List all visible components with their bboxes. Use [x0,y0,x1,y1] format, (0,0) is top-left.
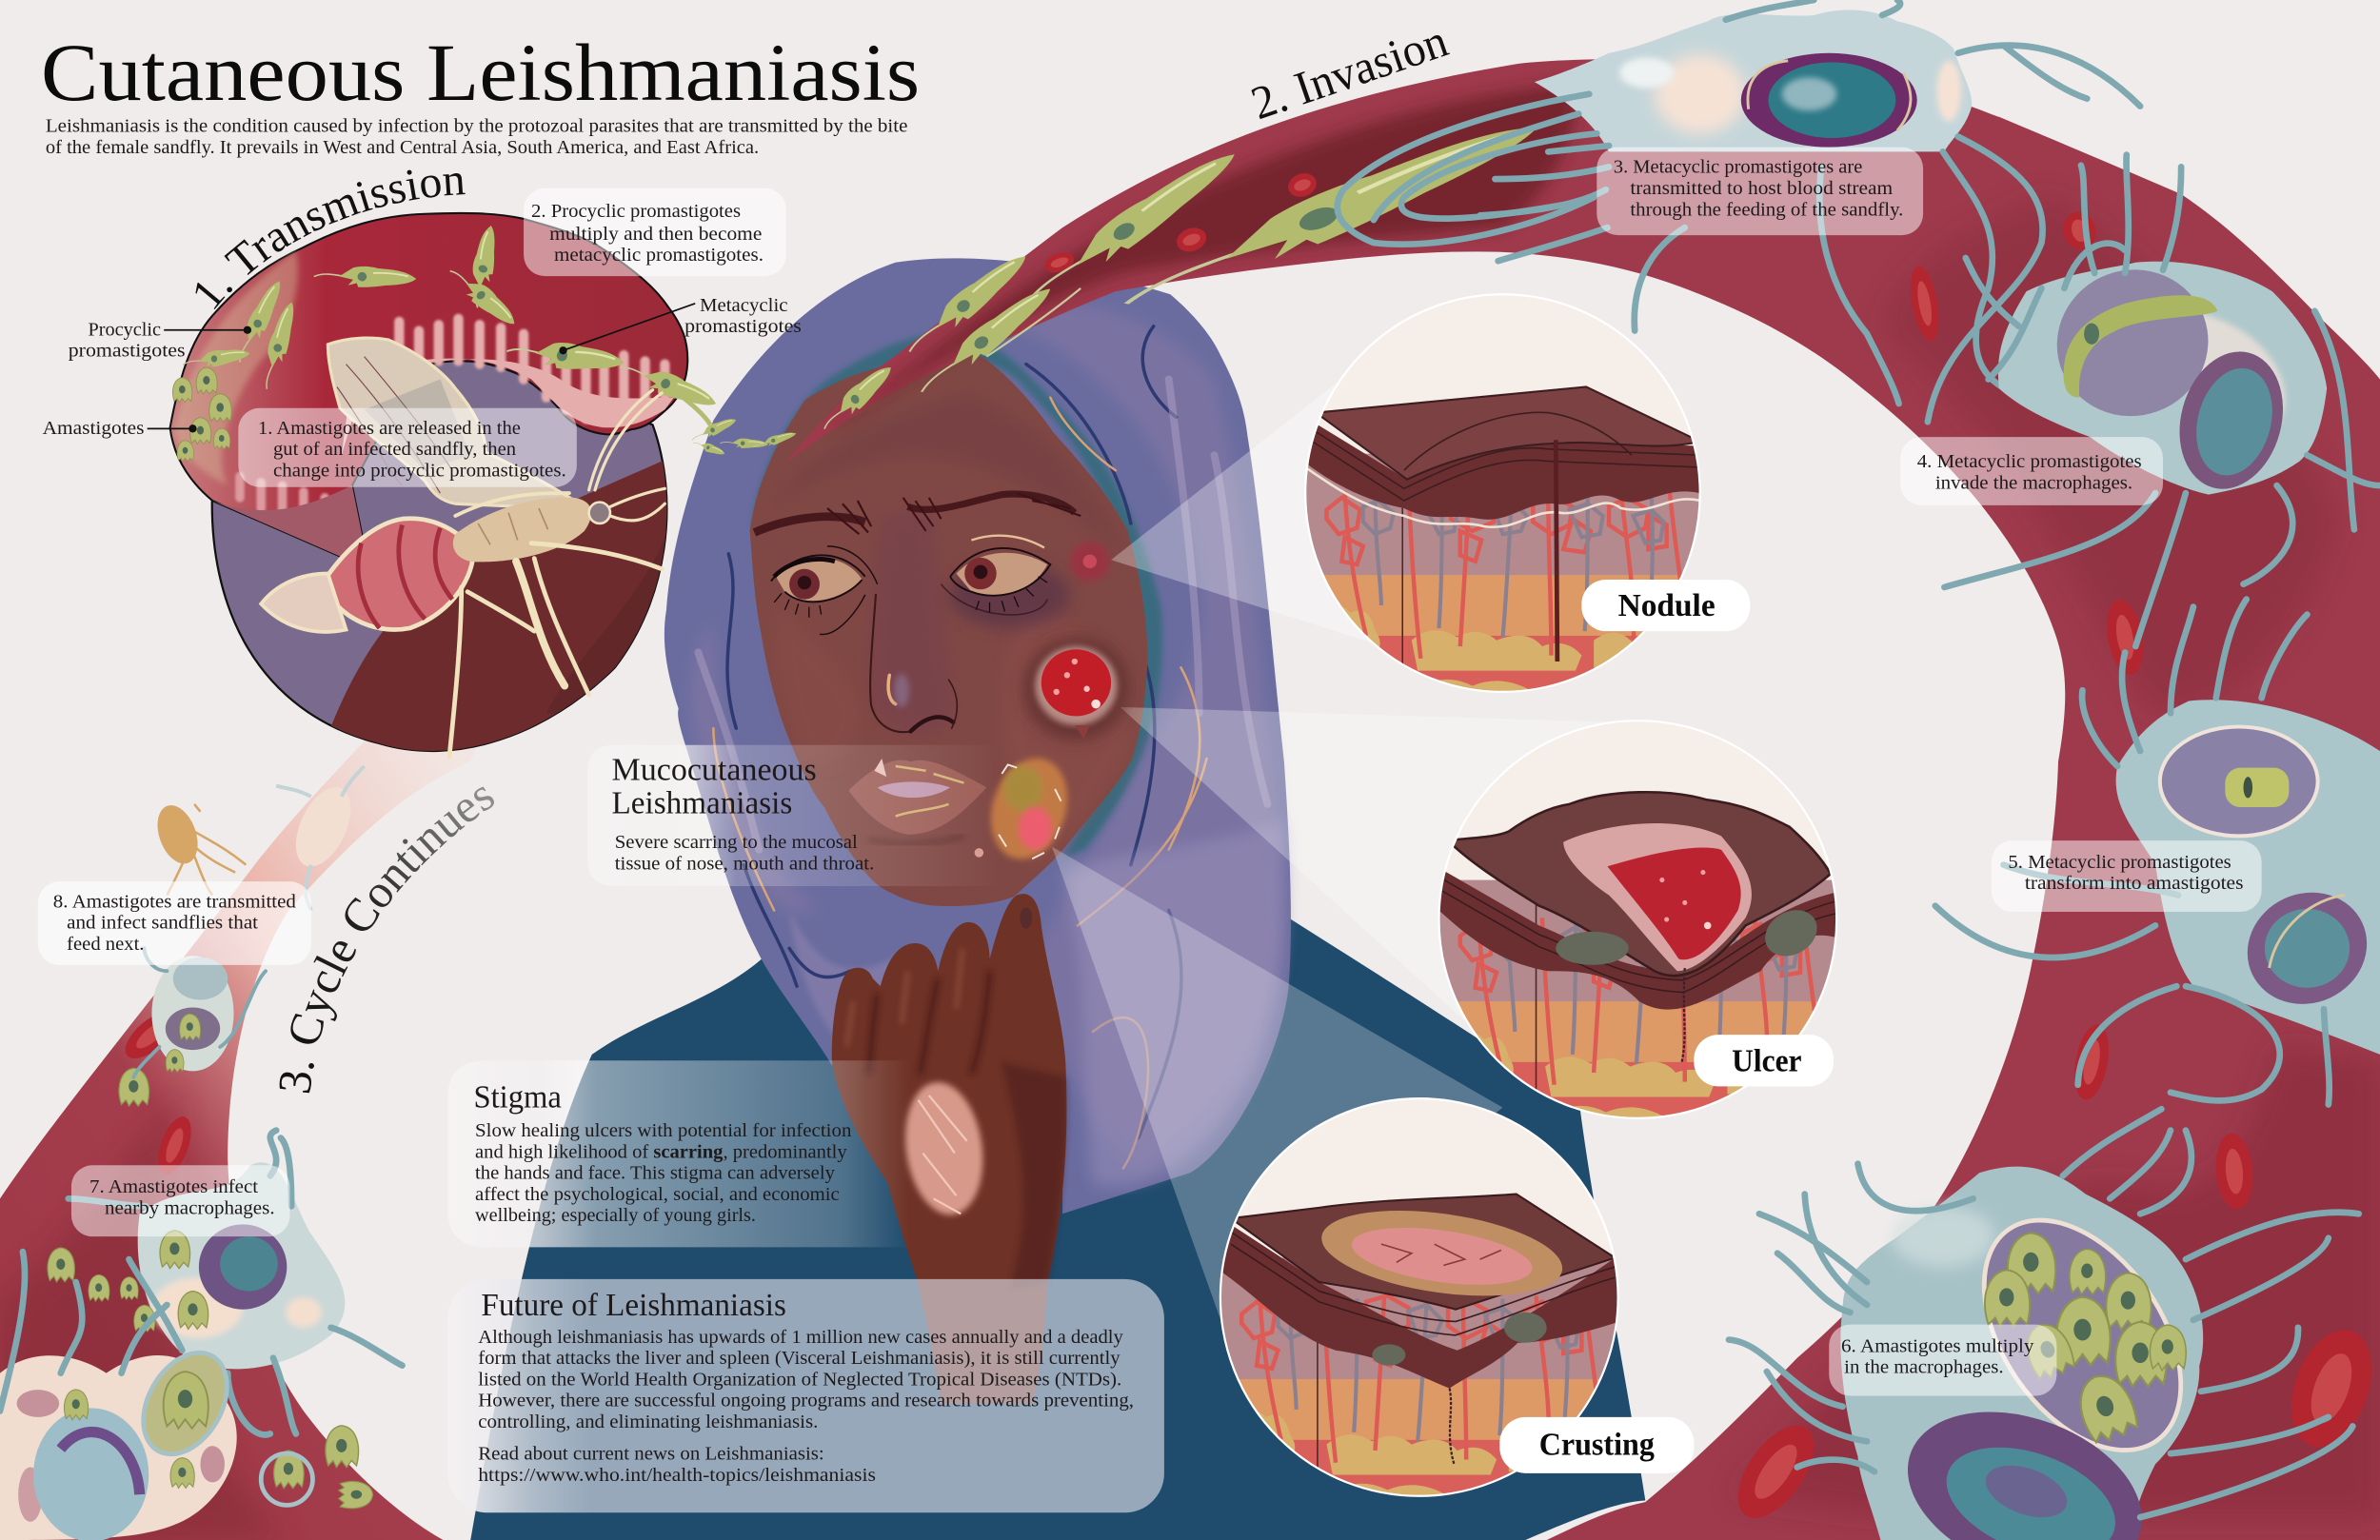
label: Ulcer [1694,1035,1834,1086]
panel: stigma: Stigma [473,1080,562,1116]
left eye [771,546,878,635]
step 5 callout: 5. Metacyclic promastigotes [2008,852,2231,873]
eye socket [948,562,1070,628]
panel: stigma: affect the psychological, social, and economic [475,1184,840,1205]
label: procyclic promastigotes [69,319,251,362]
step 4 callout: invade the macrophages. [1935,472,2132,493]
eyebrows [754,493,1081,534]
skin diagram: crusting [1215,1098,1694,1501]
step 3 callout: through the feeding of the sandfly. [1630,199,1903,220]
hood [664,258,1291,1214]
step 2 callout [524,188,786,276]
panel: stigma: wellbeing; especially of young girls. [475,1205,756,1226]
nucleus [199,1224,287,1310]
panel: future of leishmaniasis [447,1279,1164,1512]
step 5 callout: transform into amastigotes [2025,873,2244,894]
step 3 callout: transmitted to host blood stream [1630,178,1894,199]
step 8 callout: feed next. [67,934,144,955]
step 5 callout [1992,840,2262,912]
step 8 callout [38,881,311,965]
tendrils [1944,155,2380,646]
label: Nodule [1581,580,1750,631]
thorax [453,498,591,562]
tendrils [1935,600,2330,1104]
lips [848,759,986,843]
vacuole with amastigotes [1944,1184,2221,1486]
label: metacyclic promastigotes: Metacyclic [700,295,788,316]
nucleus [2229,873,2380,1023]
panel: future of leishmaniasis: However, there are successful ongoing programs and research towards preventing, [478,1391,1134,1412]
legs [449,390,664,757]
nose [870,595,957,732]
head [589,503,610,523]
panel: future of leishmaniasis: Although leishmaniasis has upwards of 1 million new cases annually and a deadly [478,1327,1123,1348]
step 1 callout [238,408,577,487]
nucleus [1741,53,1917,148]
step 1 callout: change into procyclic promastigotes. [273,461,566,482]
macrophage: lower-left with vacuoles [0,1248,373,1540]
label: Ulcer: Ulcer [1732,1043,1802,1078]
step 6 callout: in the macrophages. [1844,1357,2004,1378]
step 1 callout: 1. Amastigotes are released in the [258,418,521,439]
promastigotes in the vessel [813,117,1550,431]
parasites crossing onto the hood [683,398,798,461]
parasites in gut [172,224,719,462]
panel: stigma: Slow healing ulcers with potential for infection [475,1120,851,1141]
heading: 2. Invasion: 2. Invasion [1244,14,1454,129]
intro text [46,116,908,158]
step 2 callout: 2. Procyclic promastigotes [531,201,741,222]
macrophage: metacyclic invades [1944,155,2380,646]
nodule lesion [1070,542,1109,582]
blood vessel arc: cycle continues [0,622,492,1540]
step 2 callout: metacyclic promastigotes. [554,245,764,266]
panel: mucocutaneous leishmaniasis: Mucocutaneous [612,752,817,787]
face [750,354,1147,906]
panel: mucocutaneous leishmaniasis: tissue of nose, mouth and throat. [615,853,874,874]
label: procyclic promastigotes: promastigotes [69,341,186,362]
step 2 callout: multiply and then become [549,224,762,245]
label: Nodule: Nodule [1618,588,1716,623]
macrophage: top of arc [1338,0,2140,422]
nucleus [1885,1382,2165,1540]
blood vessel arc: invasion and host [784,59,2380,1540]
panel: stigma: the hands and face. This stigma can adversely [475,1163,835,1184]
tendrils [1338,0,2140,422]
tendrils [1729,1109,2359,1517]
panel: future of leishmaniasis: Read about current news on Leishmaniasis: [478,1444,824,1465]
panel: mucocutaneous leishmaniasis: Severe scarring to the mucosal [615,832,858,853]
lesions on face [975,542,1129,869]
label: metacyclic promastigotes: promastigotes [684,316,802,337]
macrophage: amastigotes multiply [1729,1109,2359,1540]
step 7 callout: 7. Amastigotes infect [89,1176,258,1197]
figure: woman in a hood [470,258,1645,1540]
panel: future of leishmaniasis: form that attacks the liver and spleen (Visceral Leishmaniasis), it is still currently [478,1348,1121,1369]
nucleus [2165,340,2298,501]
intro text: of the female sandfly. It prevails in West and Central Asia, South America, and East Africa. [46,137,759,158]
macrophage: transforming into amastigotes [1935,600,2380,1104]
panel: future of leishmaniasis: controlling, and eliminating leishmaniasis. [478,1412,818,1432]
title: Cutaneous Leishmaniasis [41,27,920,118]
crusting lesion [975,748,1080,869]
vessel lumen shading [827,84,1578,432]
abdomen [322,519,473,630]
step 7 callout: nearby macrophages. [105,1197,275,1218]
label: Crusting: Crusting [1539,1428,1655,1463]
step 4 callout [1900,437,2163,505]
step 3 callout: 3. Metacyclic promastigotes are [1614,157,1862,178]
panel: future of leishmaniasis: Future of Leishmaniasis [481,1288,786,1323]
shoulders and shirt [470,907,1645,1540]
hood front drape [1062,819,1286,1186]
panel: mucocutaneous leishmaniasis [587,745,1002,886]
skin diagram: nodule [1305,294,1750,697]
step 4 callout: 4. Metacyclic promastigotes [1917,451,2142,472]
amastigote in vacuole [2225,768,2289,807]
panel: sandfly gut [170,213,719,569]
ulcer lesion [1023,638,1129,740]
step 1 callout: gut of an infected sandfly, then [273,439,516,460]
label: procyclic promastigotes: Procyclic [88,319,161,340]
skin diagram: ulcer [1438,721,1836,1123]
label: Crusting [1499,1417,1694,1473]
label: amastigotes: Amastigotes [43,418,145,439]
pale left pouch [174,250,298,485]
label: metacyclic promastigotes [559,295,802,354]
macrophage: amastigotes infect nearby [69,1131,403,1434]
sandfly [261,338,664,757]
tendrils [69,1131,403,1434]
panel: stigma: and high likelihood of scarring, predominantly [475,1141,847,1162]
scar [897,1077,991,1220]
heading: 3. Cycle Continues: 3. Cycle Continues [280,786,494,1093]
panel: future of leishmaniasis: listed on the World Health Organization of Neglected Tropical Diseases (NTDs). [478,1369,1121,1390]
label: amastigotes [43,418,197,439]
face shading [766,394,1131,562]
panel: sandfly circle [211,362,668,752]
hood inner teal edge [750,334,1162,858]
pale macrophage and sandfly at top of the cycle arc [150,766,365,910]
step 3 callout [1597,148,1923,235]
hand with scar [832,894,1066,1404]
wing [327,338,589,510]
step 6 callout: 6. Amastigotes multiply [1841,1335,2033,1356]
gut villi [240,319,664,539]
step 8 callout: 8. Amastigotes are transmitted [53,891,296,912]
heading: 1. Transmission: 1. Transmission [195,169,466,309]
panel: future of leishmaniasis: https://www.who.int/health-topics/leishmaniasis [478,1465,876,1486]
panel: mucocutaneous leishmaniasis: Leishmaniasis [612,785,792,820]
step 7 callout [71,1165,290,1236]
callout cones from lesions to the skin diagrams [1052,376,1618,1328]
intro text: Leishmaniasis is the condition caused by infection by the protozoal parasites that are transmitted by the bite [46,116,908,137]
step 8 callout: and infect sandflies that [67,913,258,934]
hood folds [698,326,1267,1168]
panel: stigma [447,1060,911,1247]
step 6 callout [1829,1325,2056,1396]
macrophage: small in cycle arc [119,948,266,1106]
right eye [942,536,1050,615]
